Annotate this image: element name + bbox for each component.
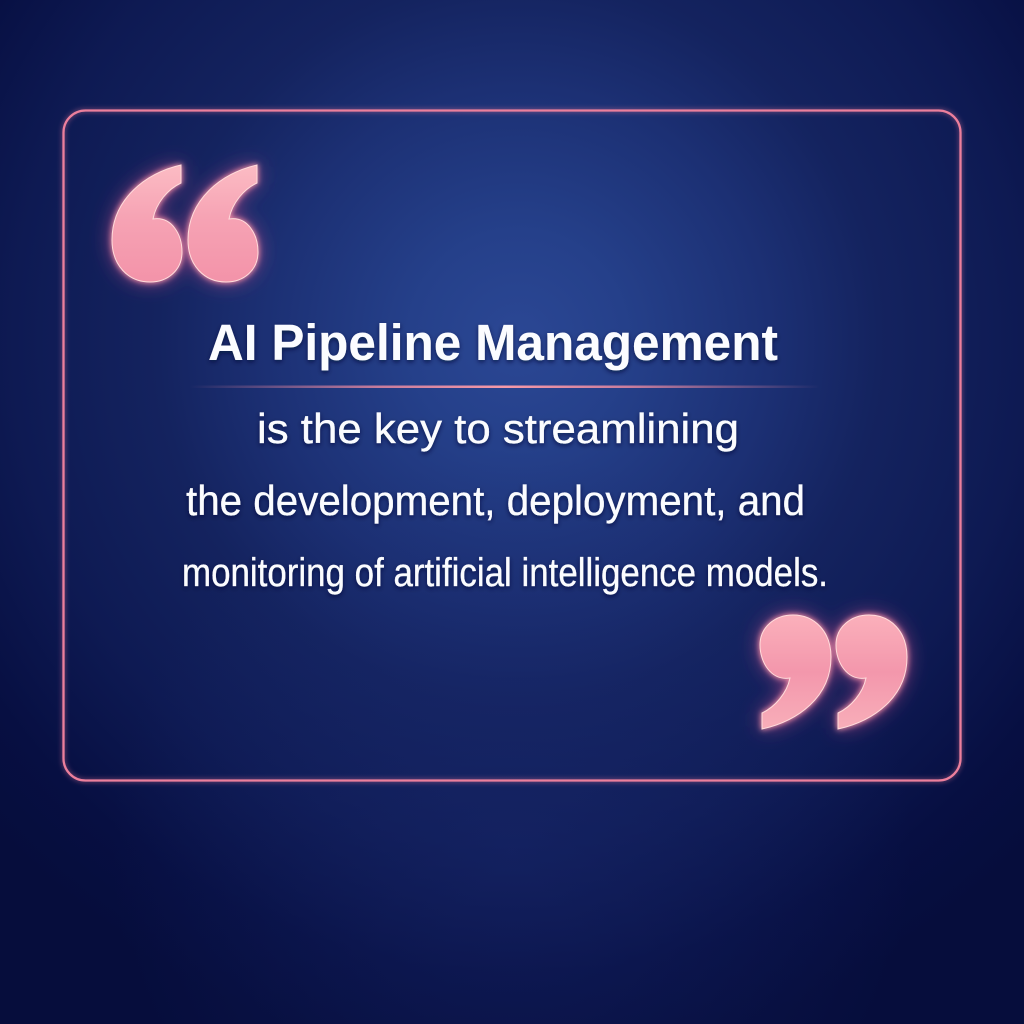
- panel: quote frame: [64, 110, 960, 780]
- heading: AI Pipeline Management: [208, 314, 778, 371]
- divider under heading: [190, 386, 820, 388]
- text block: quote body: the development, deployment, and: [186, 477, 805, 524]
- text block: quote body: [182, 405, 828, 595]
- icon: opening quotation mark: [112, 165, 258, 282]
- text block: quote body: is the key to streamlining: [257, 405, 739, 452]
- icon: closing quotation mark: [760, 615, 907, 729]
- text block: quote body: monitoring of artificial intelligence models.: [182, 551, 828, 595]
